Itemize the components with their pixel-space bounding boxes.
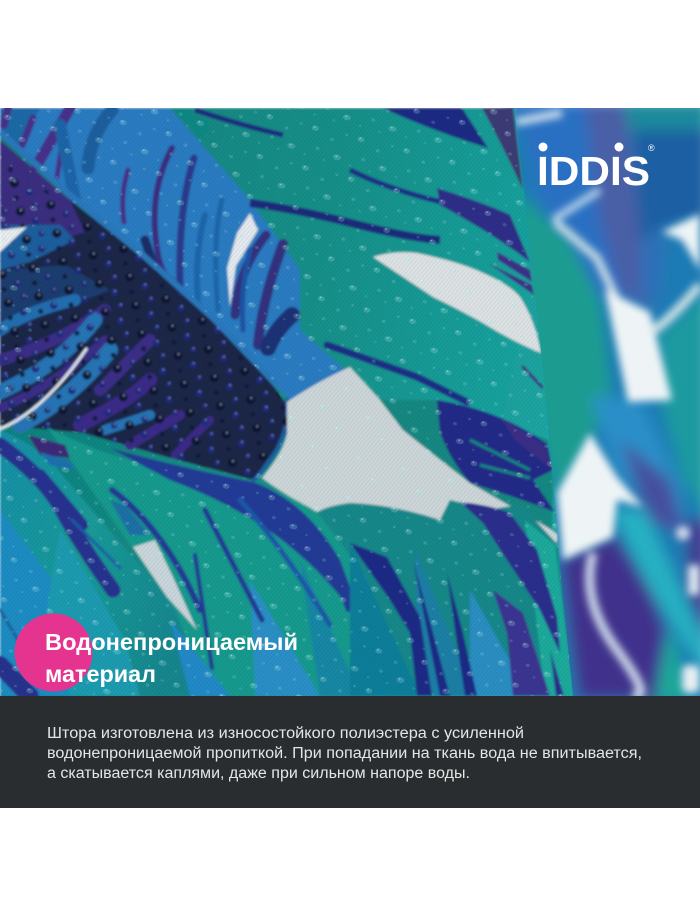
photo area: water droplets on the fabric xyxy=(0,108,580,698)
panel: dark description band xyxy=(0,696,700,808)
logo: iDDIS: ® xyxy=(648,143,655,153)
badge: pink circle xyxy=(14,614,92,692)
leaf: teal lobe with navy feather, centre right xyxy=(380,400,555,530)
text block: description: Штора изготовлена из износостойкого полиэстера с усиленной xyxy=(47,725,524,742)
leaf: broad navy feather xyxy=(111,448,352,609)
icon: white stripe across teal leaf xyxy=(373,252,541,353)
icon: white leaf streaks xyxy=(0,227,27,252)
photo area: large white fabric patch xyxy=(262,367,558,560)
midrib line xyxy=(0,132,277,385)
leaf: navy stripes on teal leaf xyxy=(327,345,542,402)
leaf: dark navy leaf with midrib xyxy=(0,140,300,490)
icon: white sliver in blue leaf xyxy=(227,213,258,307)
leaf: blue feathered leaf, top left xyxy=(0,108,345,400)
photo: blurred curtain folds in the background xyxy=(505,100,700,710)
text block: description: водонепроницаемой пропиткой. При попадании на ткань вода не впитывается, xyxy=(47,745,642,762)
text block: description: а скатывается каплями, даже при сильном напоре воды. xyxy=(47,765,470,782)
heading: Водонепроницаемый материал xyxy=(45,629,298,687)
leaf: lower right teal lobe with navy stripes xyxy=(317,500,574,696)
text block: description xyxy=(47,725,642,782)
logo: iDDIS: IDDIS xyxy=(537,148,650,194)
heading: Водонепроницаемый материал: Водонепроницаемый xyxy=(45,629,298,655)
leaf: teal top leaf xyxy=(195,108,534,295)
pale highlights xyxy=(516,113,562,122)
heading: Водонепроницаемый материал: материал xyxy=(45,661,156,687)
leaf: lower left bright teal leaves xyxy=(0,427,400,696)
photo area: fabric twill texture xyxy=(0,108,580,698)
photo: foreground curtain fabric with palm leaves xyxy=(0,108,580,698)
icon: white sliver in lower leaf xyxy=(133,540,197,630)
